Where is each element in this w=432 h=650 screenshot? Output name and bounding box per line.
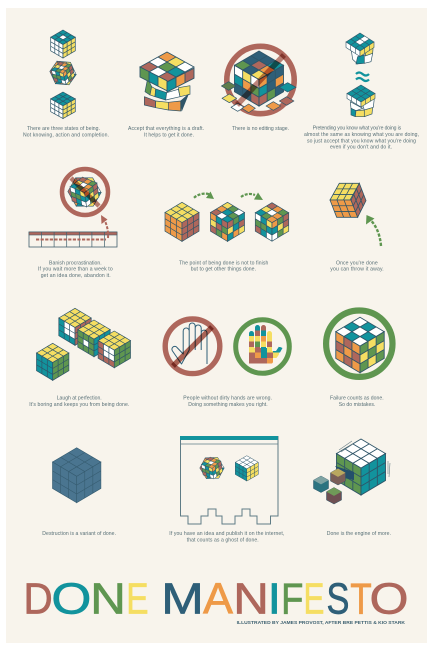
icon: twisted cube in window [197,452,227,484]
caption: Laugh at perfection. [57,395,102,401]
caption: It's boring and keeps you from being done. [29,402,129,408]
title: D [24,574,53,623]
caption [330,260,384,273]
panel: point of being done [165,192,289,273]
title: T [350,574,372,623]
caption: Not knowing, action and completion. [23,132,109,138]
icon: large cube [336,439,386,495]
caption: The point of being done is not to finish [179,260,268,266]
icon: checkered cube [336,317,384,373]
icon: hole in cube [335,466,354,480]
title: E [304,574,324,623]
icon: top layer of draft cube [140,52,194,92]
arrow: dashed green first [194,192,214,199]
title: F [281,574,303,623]
caption: but to get other things done. [191,267,256,273]
caption [128,126,204,138]
icon: prohibition ring with twisted cube [62,169,108,215]
caption: People without dirty hands are wrong. [183,396,272,402]
icon: cube with loose stickers [221,51,296,113]
panel: dirty hands [165,319,289,408]
icon: small cube bottom [326,488,342,504]
title: O [51,574,91,623]
panel: destruction [42,448,116,537]
icon: yellow orange red cube [165,202,199,241]
caption: It helps to get it done. [144,132,194,138]
icon: rotated cube [330,183,366,217]
title: N [90,574,126,623]
icon: approximately equal sign [356,72,369,81]
caption: you can throw it away. [330,267,384,273]
icon: perfect cube back left [59,308,91,345]
icon: browser window outline [180,436,278,524]
icon: motion lines [339,441,390,477]
title [24,574,408,623]
caption: get an idea done, abandon it. [41,273,111,279]
caption: so just accept that you know what you're doing [307,138,416,144]
caption [330,396,384,408]
icon: mixed cube one [210,202,245,241]
caption: There is no editing stage. [232,126,289,132]
icon: week calendar [29,232,117,247]
icon: twisted cube action [46,56,80,90]
caption [38,260,113,279]
credit line: ILLUSTRATED BY JAMES PROVOST, AFTER BRE PETTIS & KIO STARK [237,620,406,626]
icon: green ring [326,310,392,377]
panel: everything is a draft [128,52,204,138]
title: N [233,574,269,623]
icon: prohibition slash [237,55,284,105]
title: O [370,574,408,623]
panel: engine of more [314,439,391,537]
caption: If you have an idea and publish it on the internet, [169,531,284,537]
caption [169,531,284,544]
title: A [203,574,234,623]
caption: even if you don't and do it. [330,145,392,151]
icon: dirty hand approved [236,320,289,373]
icon: ghost cube [235,456,258,481]
caption: Accept that everything is a draft. [128,126,204,132]
arrow: dashed line to prohibited cube [36,215,108,240]
icon: solved cube not knowing [51,30,75,58]
icon: small cube left [314,476,328,492]
icon: perfect cube back middle [78,320,110,357]
caption: So do mistakes. [339,402,375,408]
panel: laugh at perfection [29,308,130,408]
panel: three states of being [23,30,109,138]
icon: perfect cube front [36,343,69,380]
caption: Banish procrastination. [49,260,102,266]
caption [29,395,129,408]
caption: Destruction is a variant of done. [42,531,116,537]
caption: Once you're done [336,260,378,266]
panel: no editing stage [221,46,296,132]
title: S [326,574,349,623]
caption: Failure counts as done. [330,396,384,402]
caption: that counts as a ghost of done. [187,538,259,544]
panel: failure counts [326,310,392,408]
icon: twisted cube bottom [347,85,375,117]
icon: solved cube completion [51,92,75,119]
icon: mixed cube two [255,203,289,241]
icon: clean hand prohibited [165,319,220,374]
panel: banish procrastination [29,169,117,279]
panel: ghost of done [169,436,284,544]
icon: perfect cube back right [98,331,130,368]
caption [179,260,268,273]
caption: Pretending you know what you're doing is [313,126,402,132]
arrow: dashed green second [241,192,263,200]
caption: almost the same as knowing what you are doing, [304,132,419,138]
panel: throw it away [330,183,384,273]
caption: Doing something makes you right. [188,402,268,408]
caption: There are three states of being. [27,126,100,132]
caption [23,126,109,138]
icon: prohibition ring [227,46,294,114]
title: M [161,574,204,623]
icon: twisted cube top [346,33,374,64]
title: E [126,574,149,623]
caption [183,396,272,408]
caption [304,126,419,151]
icon: small cube middle [330,468,346,485]
panel: pretending [304,33,419,151]
icon: burnt blue cube [52,448,101,503]
arrow: dashed green curve [366,215,381,246]
title: I [268,574,281,623]
caption: Done is the engine of more. [327,531,391,537]
caption: If you wait more than a week to [38,267,113,273]
icon: lower layers of draft cube [144,78,190,111]
